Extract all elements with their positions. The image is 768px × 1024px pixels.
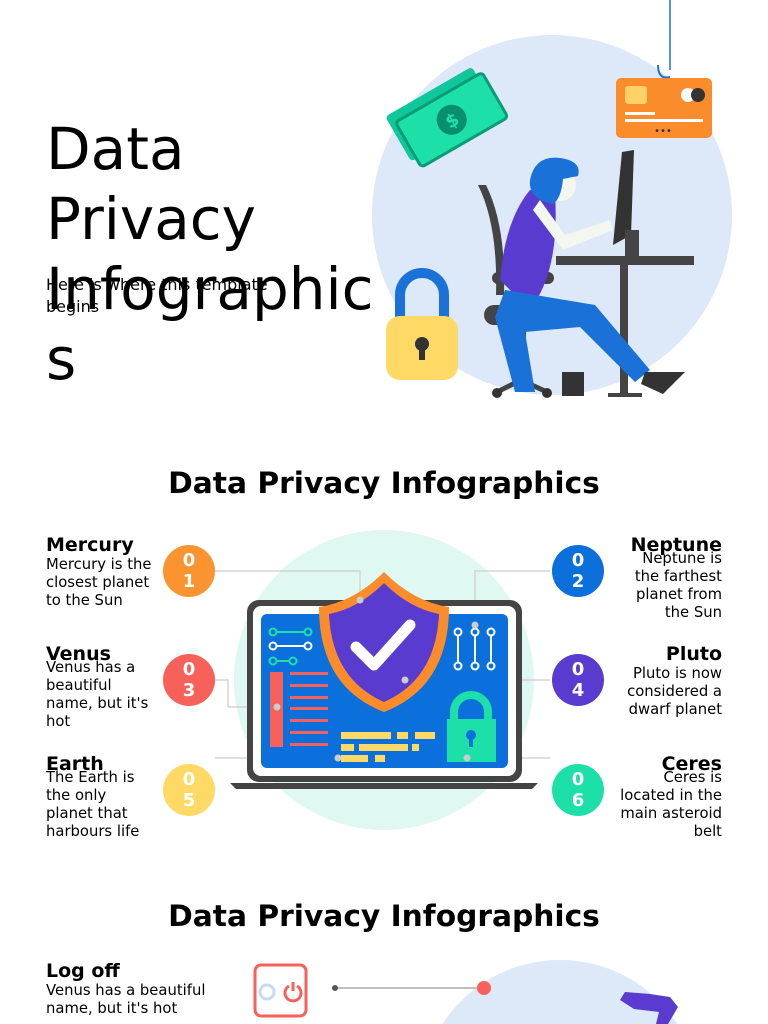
badge 05: 0 — [183, 769, 195, 790]
item: Venus: Venus has a beautiful name, but it's hot — [46, 659, 148, 730]
title: Infographics — [46, 255, 374, 393]
item: Venus: Venus — [46, 643, 111, 665]
icon: open padlock — [386, 273, 458, 380]
badge 02: 0 — [572, 550, 584, 571]
badge 02: 2 — [572, 571, 584, 592]
badge 03: 3 — [183, 680, 195, 701]
badge 04: 4 — [572, 680, 584, 701]
icon: credit card on hook — [616, 0, 712, 138]
bottom illustration — [254, 960, 678, 1024]
hero illustration — [372, 0, 732, 398]
badge 01: 1 — [183, 571, 195, 592]
badge 06: 0 — [572, 769, 584, 790]
title — [46, 115, 374, 393]
item: Ceres: Ceres — [662, 753, 722, 775]
title: Data — [46, 115, 184, 183]
icon: money — [385, 64, 508, 170]
item: Log off — [46, 960, 205, 1017]
mint circle — [234, 530, 534, 830]
item: Log off: Venus has a beautiful name, but it's hot — [46, 982, 205, 1017]
connector line — [332, 981, 491, 995]
badge 06 — [552, 764, 604, 816]
badge 01: 0 — [183, 550, 195, 571]
shield — [319, 572, 449, 712]
badge 05 — [163, 764, 215, 816]
item: Pluto: Pluto — [666, 643, 722, 665]
item: Neptune: Neptune — [631, 534, 722, 556]
item: Pluto: Pluto is now considered a dwarf planet — [627, 665, 722, 718]
item: Mercury: Mercury is the closest planet to the Sun — [46, 556, 152, 609]
badge 04 — [552, 654, 604, 706]
item: Neptune: Neptune is the farthest planet from the Sun — [635, 550, 722, 621]
background circle — [372, 35, 732, 395]
item: Mercury: Mercury — [46, 534, 134, 556]
section heading 2: Data Privacy Infographics — [168, 899, 600, 934]
connector lines — [215, 571, 553, 758]
badge 03: 0 — [183, 659, 195, 680]
item: Earth: Earth — [46, 753, 104, 775]
badge 03 — [163, 654, 215, 706]
badge 05: 5 — [183, 790, 195, 811]
laptop — [230, 600, 538, 789]
laptop illustration — [215, 530, 550, 830]
item: Log off: Log off — [46, 960, 120, 982]
icon: power button — [255, 965, 306, 1016]
item: Ceres: Ceres is located in the main asteroid belt — [620, 769, 722, 840]
title: Privacy — [46, 185, 256, 253]
badge 01 — [163, 545, 215, 597]
section heading 1: Data Privacy Infographics — [168, 466, 600, 501]
person at desk — [478, 150, 694, 398]
badge 04: 0 — [572, 659, 584, 680]
icon: credit card on hook: ••• — [654, 126, 672, 137]
hair — [620, 992, 678, 1024]
light blue circle — [420, 960, 700, 1024]
item: Earth: The Earth is the only planet that harbours life — [46, 769, 139, 840]
icon: money: $ — [442, 109, 463, 133]
subtitle: Here is where this template begins — [46, 275, 268, 316]
badge 02 — [552, 545, 604, 597]
badge 06: 6 — [572, 790, 584, 811]
